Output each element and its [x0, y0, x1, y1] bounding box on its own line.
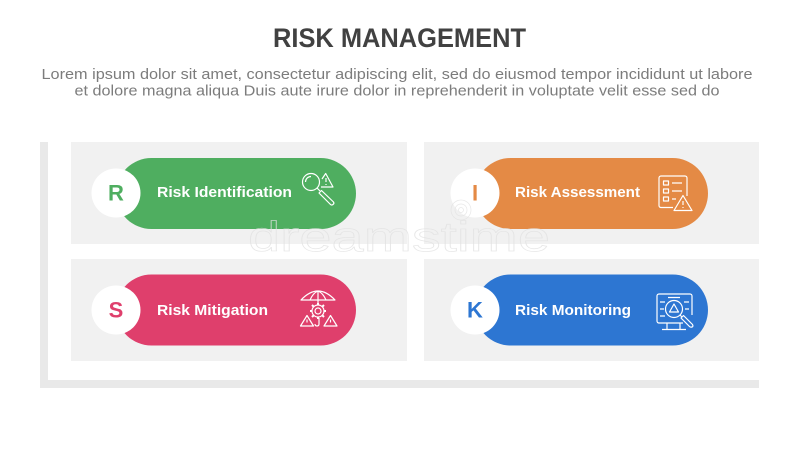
badge: I: I: [472, 180, 478, 206]
pill: risk mitigation: [116, 274, 356, 346]
watermark: dreamstime: [248, 213, 550, 260]
badge: S: S: [109, 298, 123, 322]
badge: K: [450, 286, 500, 334]
badge: S: [92, 286, 140, 334]
icon: monitor with magnifier: [657, 294, 693, 330]
panel: risk assessment: [424, 142, 759, 244]
label: risk mitigation: Risk Mitigation: [157, 302, 268, 319]
watermark: [248, 200, 550, 260]
pill: risk assessment: [475, 158, 708, 229]
subtitle text: [42, 66, 752, 100]
subtitle text: et dolore magna aliqua Duis aute irure dolor in reprehenderit in voluptate velit esse sed do: [74, 82, 720, 100]
label: risk monitoring: Risk Monitoring: [515, 302, 631, 319]
badge: R: [92, 168, 140, 218]
icon: checklist with warning: [659, 176, 692, 210]
badge: I: [450, 168, 500, 218]
title: RISK MANAGEMENT: [273, 23, 526, 53]
panel: risk monitoring: [424, 259, 759, 361]
pill: risk identification: [116, 158, 356, 229]
badge: K: K: [467, 298, 483, 322]
icon: umbrella, gear and warnings: [300, 291, 337, 326]
subtitle text: Lorem ipsum dolor sit amet, consectetur adipiscing elit, sed do eiusmod tempor incididunt ut labore: [42, 66, 752, 83]
label: risk assessment: Risk Assessment: [515, 184, 640, 201]
L-shaped frame: [40, 142, 759, 388]
label: risk identification: Risk Identification: [157, 184, 292, 201]
panel: risk identification: [71, 142, 407, 244]
icon: magnifier with warning: [302, 174, 334, 205]
badge: R: R: [108, 180, 124, 206]
pill: risk monitoring: [475, 274, 708, 346]
panel: risk mitigation: [71, 259, 407, 361]
